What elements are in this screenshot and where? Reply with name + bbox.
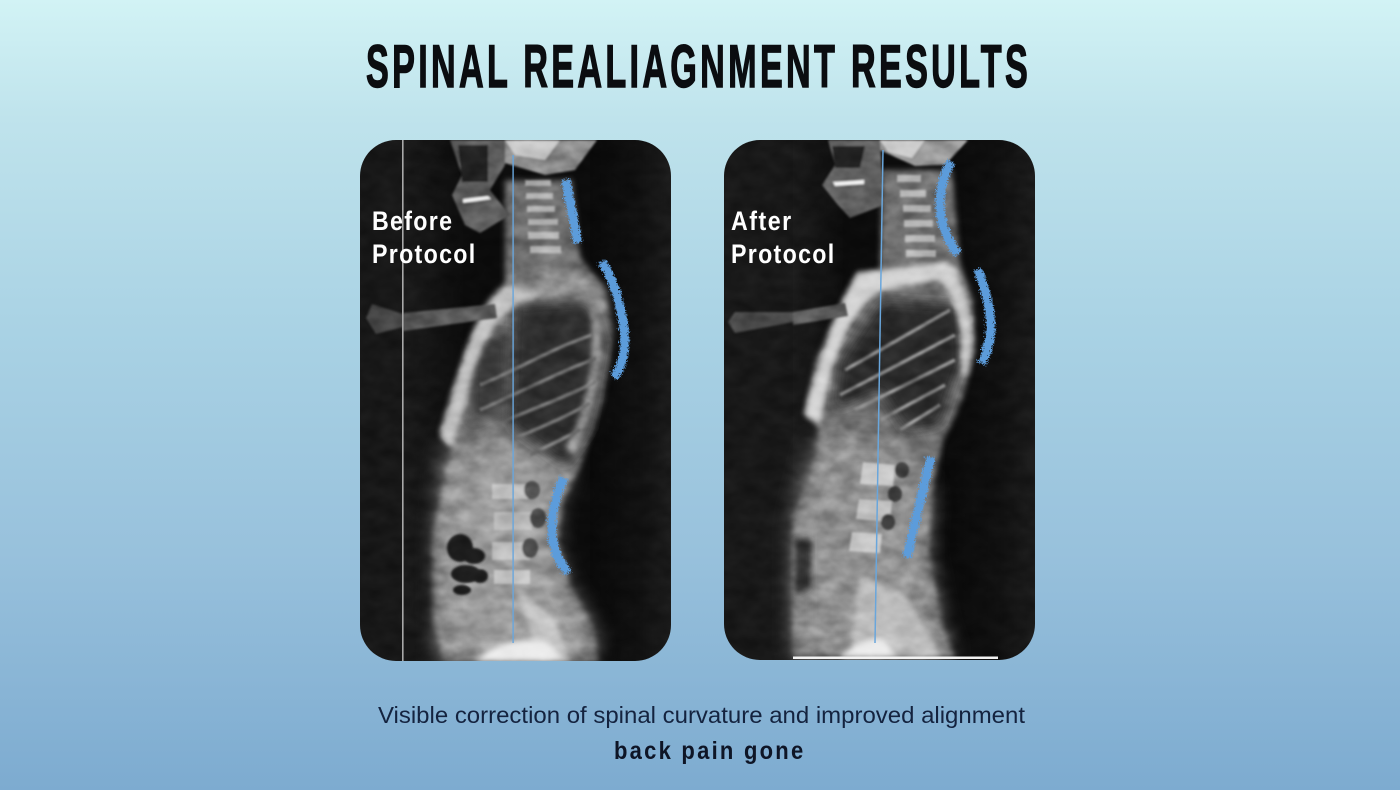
x-ray: film texture — [732, 140, 976, 660]
marker: blue curve segments — [905, 160, 989, 556]
x-ray: bowel gas — [447, 534, 488, 595]
title: SPINAL REALIAGNMENT RESULTS — [366, 34, 1028, 101]
x-ray: lumbar vertebrae — [492, 481, 546, 584]
x-ray: body silhouette — [433, 180, 613, 661]
x-ray: humerus — [366, 304, 497, 334]
x-ray: ribs — [840, 310, 955, 430]
x-ray: film texture — [374, 140, 614, 661]
x-ray: skull and jaw — [822, 140, 968, 218]
marker: plumb line — [512, 155, 514, 643]
panel: before protocol x-ray — [360, 140, 671, 661]
label: after protocol: After — [731, 206, 791, 236]
label: after protocol — [732, 210, 833, 264]
label: before protocol: Protocol — [372, 239, 475, 269]
marker: vertical reference line — [402, 140, 404, 661]
x-ray: lumbar vertebrae — [849, 462, 909, 553]
marker: bottom white line — [793, 656, 998, 659]
x-ray: humerus — [728, 303, 848, 333]
emphasis line: back pain gone — [614, 737, 803, 764]
label: after protocol: Protocol — [731, 239, 834, 269]
label: before protocol: Before — [372, 206, 452, 236]
x-ray: ribs — [480, 335, 596, 455]
marker: plumb line — [875, 150, 883, 643]
x-ray: body silhouette — [793, 170, 975, 657]
marker: blue curve segments — [550, 178, 623, 571]
x-ray: cervical vertebrae — [525, 180, 561, 253]
caption: Visible correction of spinal curvature and improved alignment — [378, 702, 1026, 728]
x-ray: cervical vertebrae — [897, 175, 936, 257]
x-ray: pelvis — [476, 585, 570, 661]
panel: after protocol x-ray — [724, 140, 1035, 660]
x-ray: pelvis — [840, 575, 940, 657]
label: before protocol — [374, 210, 474, 264]
x-ray: bowel gas — [795, 538, 812, 595]
x-ray: skull and jaw — [445, 140, 597, 233]
